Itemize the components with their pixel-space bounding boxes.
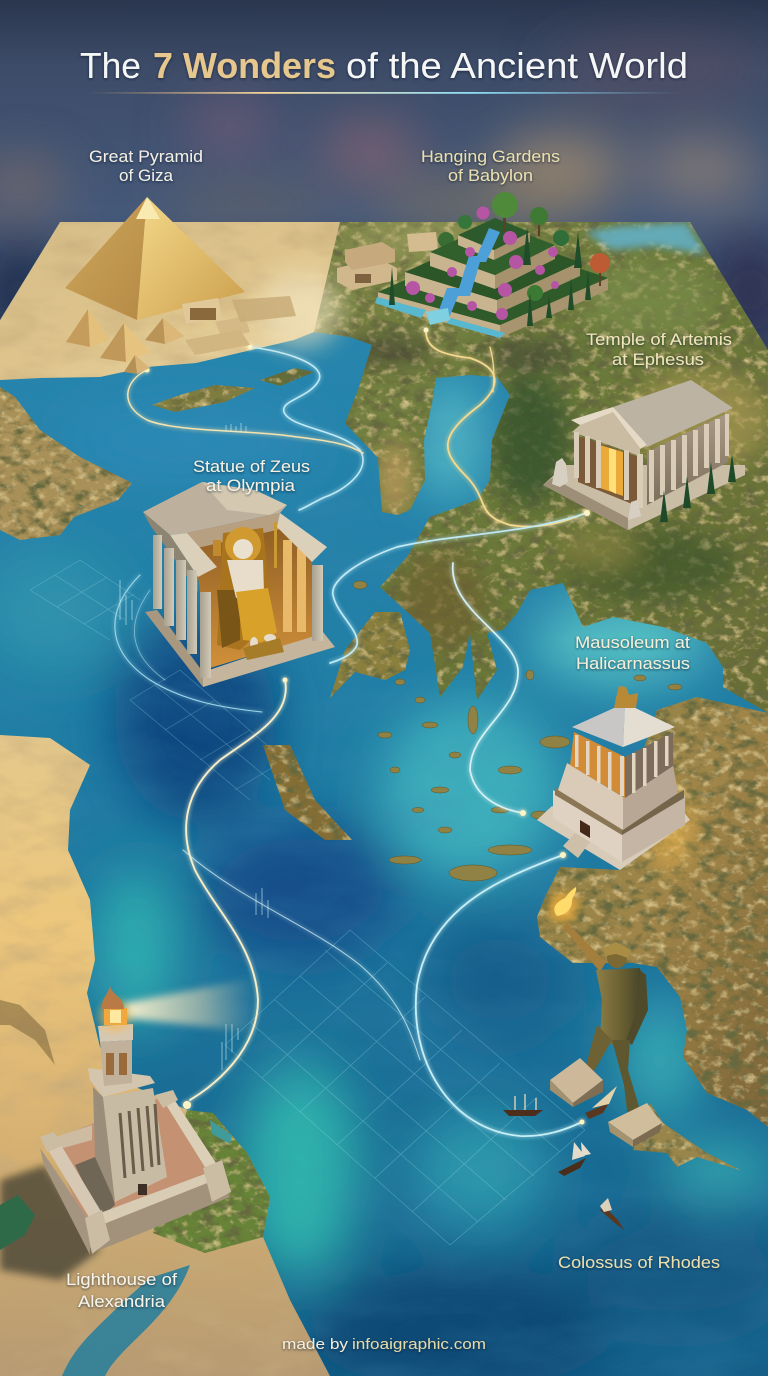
label: Statue of Zeus: at Olympia — [206, 476, 296, 495]
land shading patches — [335, 220, 768, 650]
right leg — [612, 1040, 640, 1118]
land: small island one — [152, 385, 255, 412]
feet — [250, 637, 258, 649]
terraces — [378, 218, 608, 338]
door — [580, 820, 590, 838]
delta lagoon — [210, 1120, 232, 1144]
title: The — [80, 45, 141, 86]
route glow points — [144, 328, 590, 1124]
side buildings — [337, 232, 454, 290]
desert ridges — [0, 1000, 55, 1065]
main tower — [88, 1068, 167, 1202]
wonder: Colossus of Rhodes — [503, 887, 662, 1230]
land: western coast — [0, 387, 132, 540]
lion statue — [614, 686, 638, 708]
land: Egypt and Giza plateau — [0, 222, 350, 380]
land: peloponnese — [330, 612, 410, 698]
lower walls — [553, 790, 622, 862]
wonder: Statue of Zeus at Olympia — [143, 482, 335, 687]
small pyramids — [66, 309, 184, 374]
wonder: Hanging Gardens of Babylon — [337, 192, 610, 338]
label: Great Pyramid: of Giza — [119, 166, 174, 185]
wonder: Great Pyramid of Giza — [65, 197, 296, 374]
left pedestal — [550, 1058, 603, 1107]
base steps — [145, 610, 335, 687]
body — [570, 942, 648, 1118]
dome — [102, 986, 124, 1009]
wonder: Lighthouse of Alexandria — [40, 978, 255, 1255]
frieze band — [555, 787, 622, 835]
Aegean islands — [353, 581, 682, 881]
land: Egyptian desert — [0, 735, 330, 1376]
land: Anatolian coast — [537, 697, 768, 1127]
octagonal section — [100, 1040, 132, 1086]
shadow beneath the lighthouse — [0, 1165, 100, 1280]
cylindrical tier — [98, 1024, 133, 1042]
nike figures — [213, 540, 221, 556]
gold interior — [578, 436, 642, 508]
oasis — [0, 1195, 35, 1250]
signal ticks — [120, 423, 268, 1070]
credit line: made by — [282, 1336, 349, 1353]
land: Nile delta — [153, 1110, 270, 1253]
label: Mausoleum: Halicarnassus — [576, 654, 690, 673]
label: Temple of Artemis: at Ephesus — [612, 350, 704, 369]
cypress trees — [660, 454, 736, 522]
raised arm — [562, 924, 606, 972]
flowers — [406, 206, 559, 320]
label: Mausoleum: Mausoleum at — [575, 633, 690, 652]
shaded floor — [75, 1155, 115, 1218]
land: island near Crete — [263, 745, 352, 840]
label: Temple of Artemis: Temple of Artemis — [586, 330, 732, 349]
front wall — [100, 1172, 230, 1250]
throne — [217, 528, 272, 650]
footstool — [243, 638, 284, 660]
sceptre — [274, 522, 277, 568]
right pedestal — [608, 1103, 662, 1147]
title — [80, 45, 688, 86]
colonnade — [570, 732, 673, 798]
front pediment — [572, 412, 640, 456]
back-right wall — [163, 1096, 218, 1172]
grid overlays — [30, 560, 585, 1245]
title underline — [88, 92, 678, 94]
route lines — [115, 330, 588, 1136]
torch flame — [547, 887, 579, 923]
light beam — [125, 978, 255, 1032]
roof — [571, 380, 733, 449]
roof — [143, 482, 327, 592]
wonder: Temple of Artemis at Ephesus — [543, 380, 745, 530]
mid tier — [558, 763, 678, 830]
land: Rhodes headland — [633, 1103, 740, 1170]
title: 7 Wonders — [153, 45, 336, 86]
columns — [574, 414, 729, 508]
soft light where sand meets the green land — [258, 272, 342, 348]
label: Lighthouse: Alexandria — [78, 1292, 166, 1311]
interior back columns — [283, 540, 306, 632]
pyramid roof — [572, 703, 675, 747]
temple buildings — [182, 296, 296, 355]
corner towers — [40, 1090, 231, 1254]
northern bay — [585, 222, 706, 254]
main pyramid — [65, 197, 245, 320]
trees — [389, 192, 610, 326]
sky background — [0, 0, 768, 420]
steps — [563, 833, 590, 858]
label: Statue of Zeus: Statue of Zeus — [193, 457, 310, 476]
torso — [227, 560, 264, 598]
courtyard floor — [50, 1094, 225, 1250]
label: Great Pyramid: Great Pyramid — [89, 147, 203, 166]
land: northern lands, Italy, Greece and Asia Minor coast — [314, 222, 768, 713]
label: Lighthouse: Lighthouse of — [66, 1270, 177, 1289]
robe — [236, 588, 277, 642]
ships — [503, 1086, 624, 1230]
base — [537, 800, 690, 870]
left columns — [153, 535, 323, 678]
back-left wall — [46, 1125, 92, 1150]
seated Zeus — [213, 522, 284, 660]
waterfall and pools — [375, 228, 505, 338]
left leg — [570, 1025, 612, 1080]
land: small island two — [260, 368, 314, 386]
label: Colossus: Colossus of Rhodes — [558, 1253, 720, 1272]
rear interior — [187, 513, 318, 668]
Nile river — [62, 1265, 190, 1376]
head — [233, 539, 253, 559]
label: Hanging Gardens: Hanging Gardens — [421, 147, 560, 166]
title: of the Ancient World — [346, 45, 688, 86]
wonder: Mausoleum at Halicarnassus — [537, 686, 694, 870]
side wall — [647, 412, 730, 505]
lantern — [99, 1000, 131, 1032]
label: Hanging Gardens: of Babylon — [448, 166, 533, 185]
guardian statues — [552, 458, 641, 520]
credit line: infoaigraphic.com — [352, 1336, 486, 1353]
left wall — [40, 1140, 102, 1255]
platform — [543, 465, 745, 530]
